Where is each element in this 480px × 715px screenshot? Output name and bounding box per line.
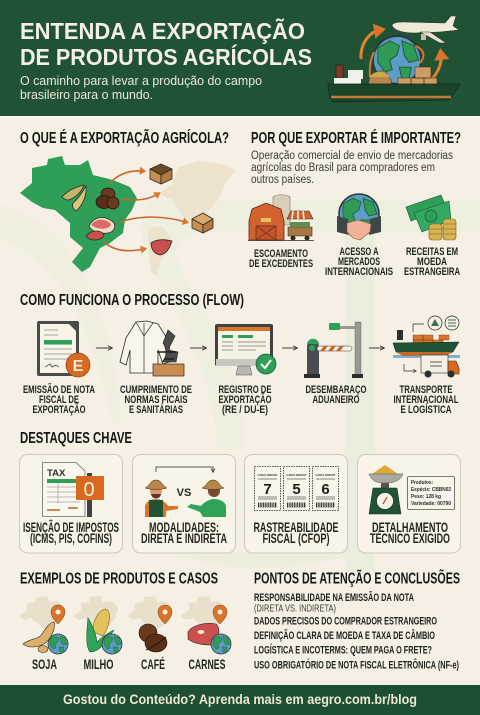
panel: o que é a exportação agrícola [20, 127, 236, 275]
arrow [190, 347, 206, 349]
label: MERCADOS [338, 256, 380, 268]
footer banner: Gostou do Conteúdo? Aprenda mais em aegro.com.br/blog [63, 691, 417, 707]
label: DIRETA E INDIRETA [141, 531, 227, 546]
label: DESEMBARAÇO [306, 384, 367, 396]
label: (RE / DU-E) [222, 404, 268, 416]
description: Operação comercial de envio de mercadorias [251, 150, 453, 162]
icon: tax form: 0 [83, 479, 95, 501]
label: TRANSPORTE [400, 384, 452, 396]
example: soja: SOJA [32, 657, 57, 672]
label: MOEDA [417, 256, 447, 268]
label: NORMAS FICAIS [124, 394, 188, 406]
label [306, 384, 367, 406]
panel: process flow [20, 292, 460, 416]
label: INTERNACIONAIS [325, 266, 393, 278]
label: RECEITAS EM [406, 246, 458, 258]
icon: two farmers: VS [177, 487, 191, 499]
label [249, 248, 313, 270]
example: soja [19, 596, 68, 672]
header banner [0, 0, 480, 116]
label [404, 246, 460, 278]
description [251, 150, 453, 186]
icon: ship, truck and customs badges [393, 316, 460, 378]
heading: EXEMPLOS DE PRODUTOS E CASOS [20, 570, 218, 588]
icon: cardboard box [192, 213, 213, 233]
label [218, 384, 272, 416]
panel: destaques chave [20, 430, 460, 553]
label: ADUANEIRO [312, 394, 360, 406]
example: milho [73, 596, 122, 672]
icon: export ship, globe and plane [328, 16, 460, 102]
icon: tax form [42, 462, 104, 517]
icon: scale with grain and spec label [369, 465, 454, 514]
card: detalhamento técnico [358, 454, 460, 553]
card: modalidades [132, 454, 236, 553]
label: RASTREABILIDADE [254, 520, 338, 535]
description: agrícolas do Brasil para compradores em [251, 162, 435, 174]
label: EMISSÃO DE NOTA [23, 383, 95, 396]
icon: scale with grain and spec label: Peso: 128 kg [411, 494, 441, 500]
example: milho: MILHO [84, 657, 114, 672]
icon: tax form: TAX [47, 468, 66, 479]
label [254, 520, 338, 546]
title: ENTENDA A EXPORTAÇÃO [20, 17, 305, 44]
icon: CFOP tags: GROS BRRBT [257, 473, 278, 477]
icon: scale with grain and spec label: Espécie: CBBN02 [411, 487, 451, 493]
panel: pontos de atenção [254, 568, 460, 672]
icon: CFOP tags: 7 [263, 481, 272, 498]
icon: globe and handshake [337, 194, 381, 240]
icon: money and coins [406, 195, 456, 240]
label: E LOGÍSTICA [400, 403, 452, 416]
icon: invoice document: E [73, 358, 84, 375]
icon: scale with grain and spec label: Variedade: 00790 [411, 501, 451, 507]
example: carnes: CARNES [188, 657, 226, 672]
map of Brazil [20, 156, 137, 272]
description: outros países. [251, 174, 314, 186]
world map watermark [148, 161, 236, 275]
label: ISENÇÃO DE IMPOSTOS [23, 520, 119, 535]
icon: customs barrier [304, 322, 363, 378]
heading: O QUE É A EXPORTAÇÃO AGRÍCOLA? [20, 127, 229, 147]
label: ESCOAMENTO [254, 248, 308, 260]
heading: DESTAQUES CHAVE [20, 430, 132, 447]
icon: crate of grain [150, 164, 172, 184]
title: DE PRODUTOS AGRÍCOLAS [20, 43, 312, 70]
arrows to markets [104, 171, 186, 251]
arrow [282, 347, 297, 349]
label: MODALIDADES: [149, 520, 219, 535]
label [120, 384, 192, 416]
icon: computer with check [215, 324, 276, 375]
panel: exemplos de produtos [19, 570, 231, 672]
subtitle: O caminho para levar a produção do campo [20, 73, 262, 88]
icon: barn and market stall [248, 195, 314, 240]
label: EXPORTAÇÃO [32, 403, 86, 416]
icon: coffee beans [96, 188, 119, 209]
label [394, 384, 459, 416]
icon: CFOP tags: 6 [321, 481, 330, 498]
arrow [369, 347, 384, 349]
label: E SANITÁRIAS [129, 403, 183, 416]
icon: CFOP tags: 5 [292, 481, 301, 498]
icon: meat cuts [86, 217, 115, 240]
icon: CFOP tags: GROS BRRBT [286, 473, 307, 477]
label: CUMPRIMENTO DE [120, 384, 192, 396]
arrow [96, 347, 112, 349]
icon: invoice document [37, 321, 90, 377]
subtitle: brasileiro para o mundo. [20, 87, 153, 102]
label [23, 383, 95, 416]
footer banner [0, 685, 480, 715]
card: isenção de impostos [20, 454, 122, 553]
point list: (DIRETA VS. INDIRETA) [254, 602, 336, 614]
example: café: CAFÉ [141, 657, 165, 672]
icon: CFOP tags [254, 466, 338, 510]
example: café [127, 596, 172, 672]
panel: por que exportar é importante [248, 128, 461, 278]
icon: lab coat and microscope [120, 321, 184, 376]
label: REGISTRO DE [218, 384, 272, 396]
label: ACESSO A [340, 246, 379, 258]
point list [254, 591, 459, 672]
label [23, 520, 119, 546]
label: DE EXCEDENTES [249, 258, 313, 270]
label: FISCAL (CFOP) [262, 531, 330, 546]
label: FISCAL DE [39, 394, 79, 406]
icon: scale with grain and spec label: Produtos: [411, 480, 433, 486]
icon: soybeans [62, 185, 86, 211]
label: EXPORTAÇÃO [218, 393, 272, 406]
label [325, 246, 393, 278]
icon: CFOP tags: GROS BRRBT [315, 473, 336, 477]
label: (ICMS, PIS, COFINS) [30, 531, 112, 546]
subtitle [20, 73, 262, 102]
card: rastreabilidade [244, 454, 348, 553]
example: carnes [181, 596, 231, 672]
heading: COMO FUNCIONA O PROCESSO (FLOW) [20, 292, 244, 309]
icon: meat on South America [151, 240, 172, 255]
label [141, 520, 227, 546]
label [370, 520, 450, 546]
title [20, 17, 312, 70]
